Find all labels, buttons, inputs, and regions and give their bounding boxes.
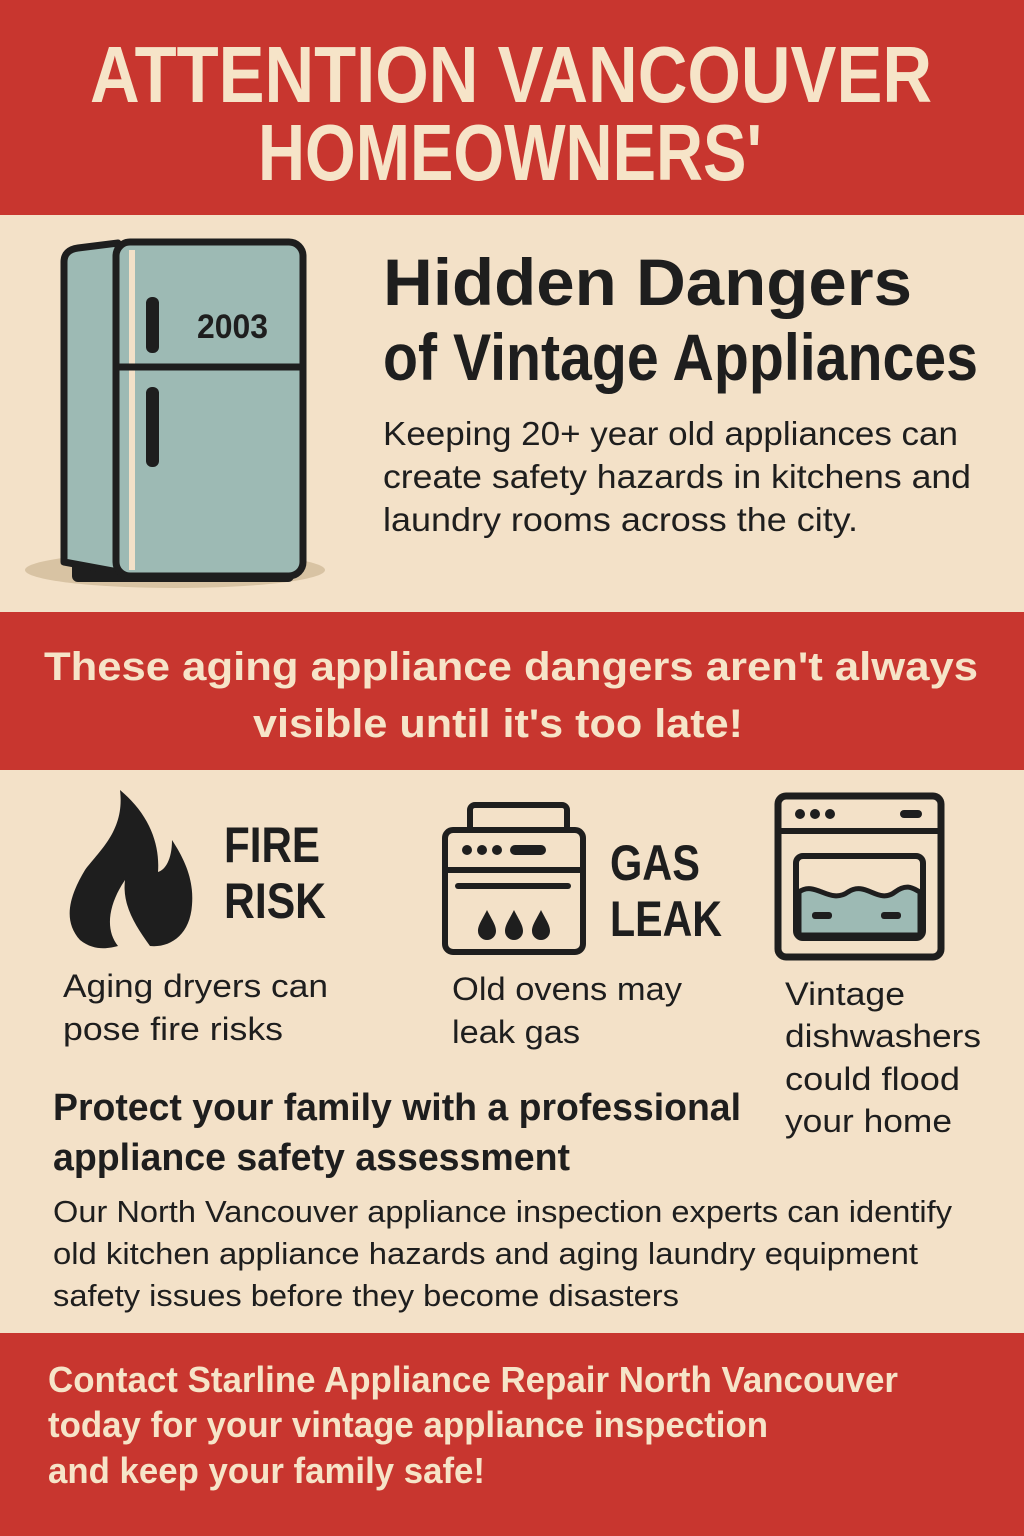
intro text: laundry rooms across the city. (383, 501, 858, 538)
icon: vintage fridge (25, 242, 325, 588)
panel: dishwasher flood (778, 796, 981, 1139)
panel: dishwasher flood: dishwashers (785, 1018, 981, 1054)
heading: hidden dangers: Hidden Dangers (383, 245, 912, 319)
panel: fire risk: Aging dryers can (63, 968, 328, 1004)
panel: fire risk: RISK (224, 873, 326, 929)
panel: gas leak: GAS (610, 835, 700, 891)
panel: fire risk: pose fire risks (63, 1011, 283, 1047)
intro text (383, 415, 971, 538)
footer call to action: Contact Starline Appliance Repair North Vancouver (48, 1359, 898, 1400)
heading: hidden dangers (383, 245, 978, 394)
panel: gas leak: LEAK (610, 891, 722, 947)
intro text: Keeping 20+ year old appliances can (383, 415, 958, 452)
icon: stove (445, 805, 583, 952)
warning band: visible until it's too late! (253, 702, 743, 746)
heading: protect your family (53, 1087, 741, 1179)
text: inspection experts (53, 1194, 953, 1313)
fridge year label: 2003 (197, 308, 268, 346)
warning band: These aging appliance dangers aren't always (44, 645, 978, 689)
header band (0, 0, 1024, 215)
footer call to action: today for your vintage appliance inspection (48, 1404, 768, 1445)
panel: fire risk: FIRE (224, 817, 320, 873)
heading: protect your family: appliance safety assessment (53, 1137, 570, 1179)
warning band (0, 612, 1024, 770)
heading: protect your family: Protect your family with a professional (53, 1087, 741, 1129)
panel: gas leak (445, 805, 722, 1050)
intro text: create safety hazards in kitchens and (383, 458, 971, 495)
panel: gas leak: leak gas (452, 1014, 580, 1050)
panel: dishwasher flood: could flood (785, 1061, 960, 1097)
panel: dishwasher flood: Vintage (785, 976, 905, 1012)
panel: dishwasher flood: your home (785, 1103, 952, 1139)
icon: dishwasher (778, 796, 941, 957)
text: inspection experts: safety issues before they become disasters (53, 1278, 679, 1313)
panel: gas leak: Old ovens may (452, 971, 682, 1007)
panel: fire risk (63, 790, 328, 1047)
text: inspection experts: Our North Vancouver appliance inspection experts can identify (53, 1194, 953, 1229)
icon: flame (70, 790, 192, 948)
text: inspection experts: old kitchen appliance hazards and aging laundry equipment (53, 1236, 918, 1271)
title (90, 30, 932, 197)
footer call to action (0, 1333, 1024, 1536)
title: HOMEOWNERS' (258, 108, 762, 197)
footer call to action: and keep your family safe! (48, 1450, 485, 1491)
